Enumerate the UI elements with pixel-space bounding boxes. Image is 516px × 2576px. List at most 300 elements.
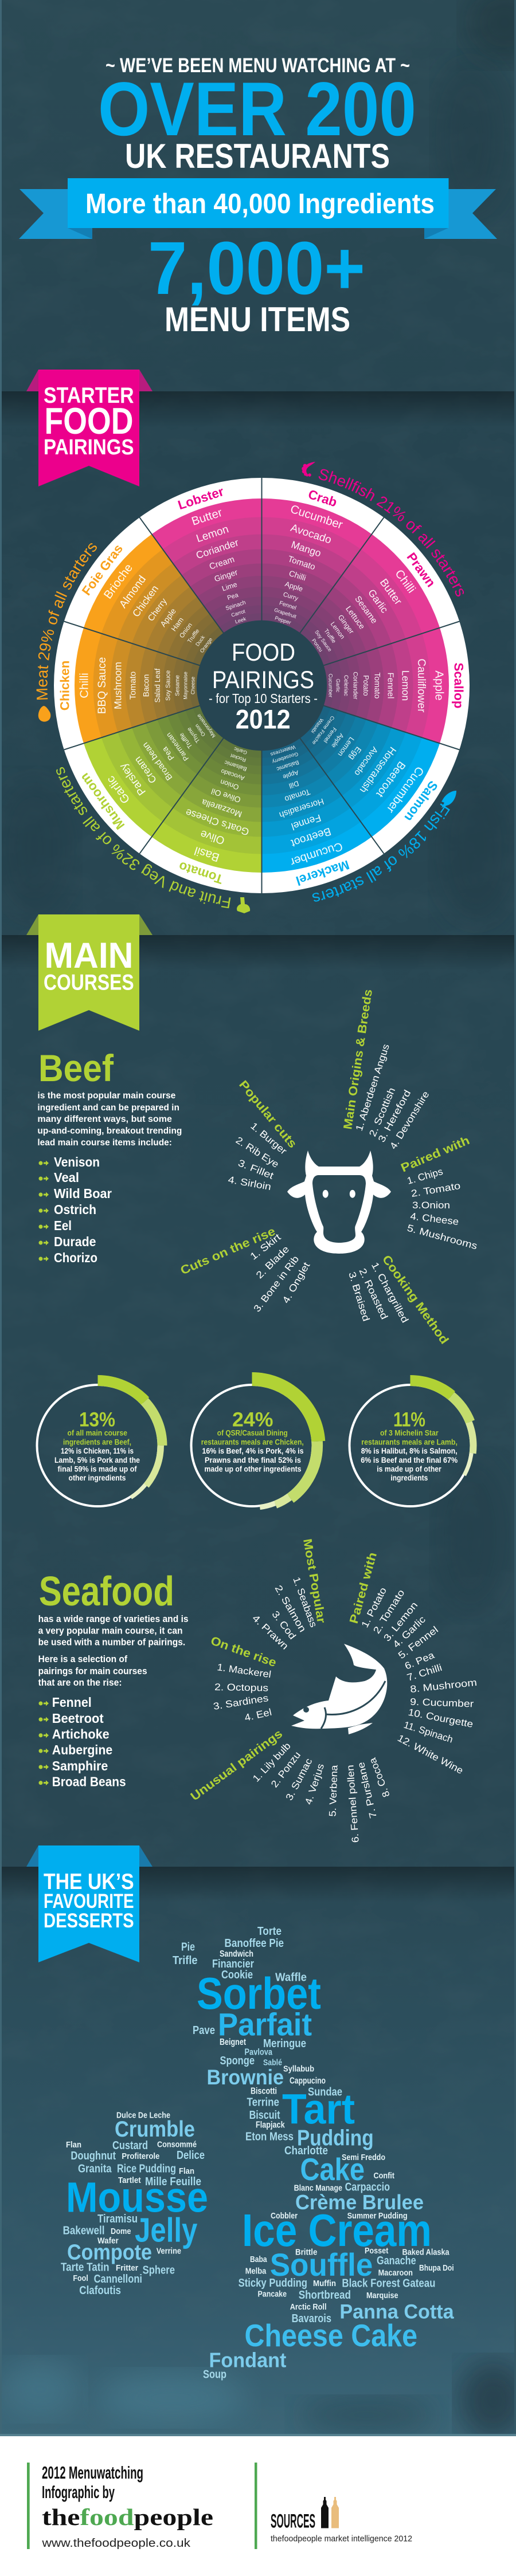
segment: tomato: Olive Oil bbox=[210, 787, 242, 804]
word cloud: UK map of desserts: Bakewell bbox=[63, 2224, 104, 2237]
list: pairings on the rise: Fennel bbox=[52, 1695, 92, 1710]
paragraph: pairings for main courses bbox=[38, 1666, 147, 1676]
word cloud: UK map of desserts: Sponge bbox=[220, 2055, 255, 2067]
word cloud: UK map of desserts: Flan bbox=[66, 2140, 81, 2150]
beef radial: cooking method: 1. Chargrilled bbox=[369, 1260, 411, 1325]
beef radial: main origins and breeds bbox=[341, 988, 431, 1151]
word cloud: UK map of desserts: Arctic Roll bbox=[290, 2302, 327, 2312]
segment: crab: Chilli bbox=[288, 568, 307, 583]
segment: foie gras: Cherry bbox=[146, 596, 169, 623]
word cloud: UK map of desserts: Wafer bbox=[97, 2236, 119, 2245]
beef radial: paired with: 3.Onion bbox=[412, 1200, 450, 1211]
seafood radial: on the rise: 1. Mackerel bbox=[216, 1662, 272, 1680]
stat circle: 13% beef bbox=[33, 1381, 163, 1510]
segment: foie gras: Onion bbox=[178, 622, 194, 639]
segment: mushroom bbox=[77, 697, 228, 832]
word cloud: UK map of desserts: Sticky Pudding bbox=[239, 2277, 307, 2290]
paragraph: ingredient and can be prepared in bbox=[37, 1103, 179, 1113]
segment: crab: Fennel bbox=[279, 600, 297, 611]
word cloud: UK map of desserts: Baba bbox=[250, 2255, 267, 2264]
seafood radial: most popular: 1. Seabass bbox=[291, 1576, 319, 1629]
ribbon: 40,000 ingredients: More than 40,000 Ingredients bbox=[85, 189, 435, 219]
stat circle: 13% beef: of all main course bbox=[68, 1429, 127, 1438]
wheel centre title bbox=[197, 621, 327, 751]
segment: tomato: Avocado bbox=[220, 767, 245, 782]
segment: mackerel: Apple bbox=[282, 769, 299, 780]
word cloud: UK map of desserts: Confit bbox=[374, 2171, 394, 2181]
beef radial: popular cuts: 3. Fillet bbox=[237, 1157, 275, 1181]
word cloud: UK map of desserts: Torte bbox=[257, 1925, 282, 1938]
outer white ring bbox=[54, 478, 470, 893]
paragraph bbox=[37, 1091, 182, 1148]
segment: crab bbox=[256, 483, 351, 631]
seafood radial: on the rise: 4. Eel bbox=[244, 1707, 273, 1723]
word cloud: UK map of desserts: Tiramisu bbox=[97, 2213, 138, 2225]
seafood radial: on the rise: 2. Octopus bbox=[214, 1682, 268, 1694]
seafood radial: paired with: 9. Cucumber bbox=[410, 1697, 474, 1709]
seafood radial: on the rise bbox=[209, 1634, 278, 1723]
segment: chicken: Bacon bbox=[141, 674, 150, 697]
segment: mackerel: Dill bbox=[288, 779, 300, 790]
segment: scallop bbox=[327, 659, 466, 713]
list: pairings on the rise: Beetroot bbox=[52, 1711, 104, 1726]
segment: chicken: BBQ Sauce bbox=[96, 657, 108, 714]
word cloud: UK map of desserts: Meringue bbox=[263, 2037, 306, 2050]
icon: chicken leg bbox=[38, 706, 50, 722]
word cloud: UK map of desserts: Sundae bbox=[308, 2086, 342, 2099]
word cloud: UK map of desserts: Biscotti bbox=[251, 2087, 277, 2096]
section ribbon: favourite desserts: FAVOURITE bbox=[44, 1890, 134, 1913]
paragraph: that are on the rise: bbox=[38, 1678, 122, 1688]
word cloud: UK map of desserts: Syllabub bbox=[283, 2064, 314, 2074]
section ribbon: starter food pairings: FOOD bbox=[45, 400, 133, 442]
panel: beef copy bbox=[37, 1047, 182, 1265]
word cloud: UK map of desserts: Compote bbox=[67, 2240, 152, 2264]
paragraph: many different ways, but some bbox=[37, 1114, 172, 1124]
segment: mackerel: Balsamic bbox=[276, 759, 300, 772]
word cloud: UK map of desserts: Pancake bbox=[258, 2290, 287, 2299]
stat label: menu items: MENU ITEMS bbox=[165, 300, 350, 339]
word cloud: UK map of desserts: Sablé bbox=[263, 2058, 282, 2067]
panel: seafood copy bbox=[38, 1569, 189, 1789]
beef radial: cooking method: Cooking Method bbox=[380, 1253, 451, 1346]
stat circle: 13% beef: 12% is Chicken, 11% is bbox=[61, 1447, 134, 1455]
segment: scallop: Cucumber bbox=[327, 674, 333, 697]
word cloud: UK map of desserts: Mousse bbox=[66, 2174, 208, 2221]
segment: mushroom: Broad bean bbox=[140, 740, 174, 782]
list: pairings on the rise: Aubergine bbox=[52, 1742, 112, 1757]
segment: chicken: Sesame bbox=[174, 675, 181, 696]
stat circle: 11% lamb: 11% bbox=[393, 1408, 425, 1431]
word cloud: UK map of desserts: Semi Freddo bbox=[342, 2153, 385, 2162]
paragraph: lead main course items include: bbox=[37, 1138, 172, 1148]
stat circle: 13% beef: ingredients are Beef, bbox=[63, 1438, 131, 1446]
stat circle: 24% chicken: 16% is Beef, 4% is Pork, 4% is bbox=[202, 1447, 304, 1455]
word cloud: UK map of desserts: Beignet bbox=[220, 2037, 247, 2047]
seafood radial: paired with: 8. Mushroom bbox=[409, 1677, 478, 1695]
stat circle: 24% chicken: 24% bbox=[232, 1408, 273, 1431]
segment: mushroom: Parsley bbox=[117, 761, 148, 798]
green bands: fruit and veg bbox=[84, 706, 261, 873]
segment: lobster: Lemon bbox=[195, 523, 230, 545]
beef radial: paired with: 5. Mushrooms bbox=[406, 1223, 479, 1251]
seafood radial: paired with: 5. Fennel bbox=[396, 1624, 440, 1661]
segment: tomato: Basil bbox=[193, 844, 221, 864]
heading: beef: Beef bbox=[38, 1047, 114, 1089]
segment: prawn: Garlic bbox=[366, 587, 390, 615]
icon: fish bbox=[441, 791, 456, 808]
list: trending items: Chorizo bbox=[54, 1250, 97, 1265]
segment: crab: Avocado bbox=[289, 522, 333, 547]
word cloud: UK map of desserts: Financier bbox=[212, 1958, 254, 1970]
stat label: UK restaurants: UK RESTAURANTS bbox=[125, 137, 390, 175]
segment: tomato bbox=[167, 738, 273, 890]
segment: prawn: Chilli bbox=[392, 567, 418, 595]
beef radial: main origins and breeds: 2. Scottish bbox=[367, 1086, 397, 1138]
word cloud: UK map of desserts: Terrine bbox=[247, 2096, 279, 2108]
ribbon: 40,000 ingredients bbox=[19, 178, 497, 239]
icon: fish bbox=[291, 1644, 387, 1734]
beef radial: cuts on the rise: 3. Bone in Rib bbox=[252, 1254, 301, 1314]
word cloud: UK map of desserts: Tartlet bbox=[118, 2176, 141, 2185]
segment: chicken: Cheese bbox=[190, 677, 196, 694]
word cloud: UK map of desserts: Cannelloni bbox=[94, 2273, 142, 2286]
seafood radial: unusual pairings: Unusual pairings bbox=[188, 1727, 285, 1804]
list: trending items: Durade bbox=[54, 1234, 96, 1249]
segment: tomato: Onion bbox=[219, 777, 240, 791]
segment: salmon: Apple bbox=[330, 732, 345, 749]
credit block: www.thefoodpeople.co.uk bbox=[41, 2537, 191, 2550]
segment: foie gras bbox=[79, 541, 226, 671]
segment: salmon: Egg bbox=[347, 745, 363, 762]
segment: lobster: Ginger bbox=[213, 567, 239, 583]
word cloud: UK map of desserts: Doughnut bbox=[71, 2150, 116, 2162]
segment: tomato: Rocket bbox=[229, 753, 247, 763]
sources block: thefoodpeople market intelligence 2012 bbox=[271, 2534, 412, 2544]
segment: chicken: Chilli bbox=[78, 673, 91, 698]
credit block: 2012 Menuwatching bbox=[42, 2463, 143, 2483]
seafood radial: paired with: Paired with bbox=[347, 1551, 380, 1625]
word cloud: UK map of desserts: Cake bbox=[300, 2151, 365, 2187]
segment: mushroom: Onion bbox=[194, 723, 206, 737]
beef radial: cooking method: 3. Braised bbox=[346, 1271, 372, 1322]
word cloud: UK map of desserts: Pavlova bbox=[244, 2048, 272, 2057]
seafood radial: paired with: 12. White Wine bbox=[396, 1733, 465, 1776]
paragraph: up-and-coming, breakout trending bbox=[37, 1126, 182, 1136]
segment: salmon: Salmon bbox=[401, 778, 440, 824]
section ribbon: starter food pairings: PAIRINGS bbox=[44, 435, 134, 460]
stat: over 200: OVER 200 bbox=[98, 67, 416, 152]
heading: seafood: Seafood bbox=[39, 1569, 174, 1615]
word cloud: UK map of desserts: Bavarois bbox=[292, 2312, 331, 2325]
paragraph: has a wide range of varieties and is bbox=[38, 1614, 189, 1624]
word cloud: UK map of desserts: Biscuit bbox=[249, 2109, 280, 2122]
beef radial: popular cuts: 1. Burger bbox=[248, 1121, 289, 1157]
word cloud: UK map of desserts: Crumble bbox=[115, 2117, 195, 2142]
beef radial: paired with bbox=[399, 1134, 479, 1251]
segment: salmon: Horseradish bbox=[358, 745, 398, 795]
section ribbon: starter food pairings: STARTER bbox=[44, 383, 134, 408]
stat circle: 24% chicken bbox=[186, 1379, 319, 1512]
word cloud: UK map of desserts: Summer Pudding bbox=[347, 2211, 408, 2221]
segment: mackerel: Tomato bbox=[283, 787, 311, 804]
beef radial: popular cuts bbox=[227, 1078, 299, 1192]
stat circle: 11% lamb: 8% is Halibut, 8% is Salmon, bbox=[361, 1447, 458, 1455]
word cloud: UK map of desserts: Banoffee Pie bbox=[225, 1937, 284, 1950]
list: trending items: Venison bbox=[54, 1155, 100, 1169]
word cloud: UK map of desserts: Cookie bbox=[221, 1969, 253, 1981]
segment: scallop: Garlic bbox=[335, 679, 341, 693]
intro line: ~ WE’VE BEEN MENU WATCHING AT ~ bbox=[105, 54, 410, 77]
blue bands: fish bbox=[263, 706, 440, 873]
word cloud: UK map of desserts: Soup bbox=[203, 2369, 226, 2381]
segment: chicken: Chicken bbox=[57, 661, 72, 710]
word cloud: UK map of desserts: Jelly bbox=[135, 2211, 198, 2249]
seafood radial: unusual pairings: 1. Lily bulb bbox=[251, 1741, 293, 1784]
segment: crab: Pepper bbox=[274, 615, 292, 626]
word cloud: UK map of desserts: Carpaccio bbox=[345, 2181, 390, 2194]
word cloud: UK map of desserts: Dome bbox=[111, 2226, 131, 2236]
wheel centre title: PAIRINGS bbox=[212, 666, 314, 694]
segment: scallop: Apple bbox=[432, 670, 445, 701]
list: trending items: Eel bbox=[54, 1218, 72, 1233]
caption: shellfish share: Shellfish 21% of all starters bbox=[319, 469, 464, 597]
credit block bbox=[27, 2463, 213, 2550]
segment dividers bbox=[64, 478, 459, 893]
segment: chicken bbox=[57, 657, 196, 714]
seafood radial: most popular: 4. Prawn bbox=[250, 1613, 291, 1652]
beef radial: main origins and breeds: 1. Aberdeen Angus bbox=[354, 1043, 392, 1132]
segment: mushroom: Garlic bbox=[104, 773, 132, 806]
word cloud: UK map of desserts: Tart bbox=[282, 2086, 355, 2133]
seafood radial: unusual pairings: 3. Sumac bbox=[284, 1756, 315, 1802]
paragraph: a very popular main course, it can bbox=[38, 1626, 183, 1636]
segment: mushroom: Thyme bbox=[186, 726, 201, 744]
word cloud: UK map of desserts: Consommé bbox=[157, 2139, 197, 2149]
segment: scallop: Fennel bbox=[386, 673, 396, 698]
section ribbon: starter food pairings bbox=[26, 370, 153, 486]
word cloud: UK map of desserts: Pudding bbox=[297, 2126, 374, 2151]
word cloud: UK map of desserts: Pie bbox=[181, 1941, 195, 1954]
seafood radial: paired with: 11. Spinach bbox=[402, 1719, 454, 1745]
word cloud: UK map of desserts: Tarte Tatin bbox=[61, 2261, 110, 2273]
word cloud: UK map of desserts: Waffle bbox=[275, 1972, 307, 1984]
segment: foie gras: Orange bbox=[199, 637, 213, 654]
word cloud: UK map of desserts: Crème Brulee bbox=[295, 2190, 424, 2214]
icon: vegetable bbox=[237, 897, 250, 913]
wheel centre title: - for Top 10 Starters - bbox=[209, 691, 318, 706]
segment: crab: Apple bbox=[284, 580, 304, 593]
segment: chicken: Soy Sauce bbox=[165, 670, 171, 701]
word cloud: UK map of desserts: Muffin bbox=[313, 2279, 336, 2288]
word cloud: UK map of desserts: Profiterole bbox=[122, 2151, 159, 2161]
pink bands: shellfish bbox=[152, 498, 449, 743]
segment: lobster: Lobster bbox=[176, 484, 226, 512]
segment: prawn: Lettuce bbox=[344, 604, 367, 631]
segment: scallop: Cauliflower bbox=[415, 659, 427, 713]
segment: chicken: Mushroom bbox=[112, 662, 124, 709]
list: pairings on the rise: Artichoke bbox=[52, 1727, 110, 1742]
seafood radial: paired with: 1. Potato bbox=[359, 1585, 389, 1629]
segment: lobster: Lime bbox=[221, 580, 238, 593]
word cloud: UK map of desserts: Marquise bbox=[366, 2291, 398, 2300]
segment: crab: Curry bbox=[282, 591, 299, 602]
seafood radial: on the rise: On the rise bbox=[209, 1634, 278, 1670]
stat circle: 11% lamb: ingredients bbox=[390, 1474, 428, 1482]
segment: chicken: Salad Leaf bbox=[154, 668, 162, 702]
beef radial: paired with: 4. Cheese bbox=[410, 1211, 459, 1227]
seafood radial: paired with: 7. Chilli bbox=[405, 1662, 443, 1683]
segment: crab: Mango bbox=[290, 539, 323, 559]
segment: foie gras: Almond bbox=[117, 574, 148, 610]
word cloud: UK map of desserts: Melba bbox=[245, 2267, 267, 2276]
segment: prawn: Prawn bbox=[404, 550, 438, 590]
word cloud: UK map of desserts: Sandwich bbox=[220, 1949, 253, 1959]
credit block: Infographic by bbox=[42, 2482, 115, 2502]
segment: foie gras: Brioche bbox=[101, 561, 135, 602]
word cloud: UK map of desserts: Cheese Cake bbox=[244, 2318, 417, 2353]
segment: mackerel bbox=[256, 740, 351, 888]
segment: salmon: Wasabi bbox=[310, 717, 325, 735]
word cloud: UK map of desserts: Brownie bbox=[206, 2065, 284, 2089]
word cloud: UK map of desserts bbox=[61, 1925, 454, 2381]
segment: crab: Grapefruit bbox=[273, 607, 298, 619]
segment: foie gras: Chicken bbox=[130, 583, 161, 619]
word cloud: UK map of desserts: Trifle bbox=[173, 1954, 197, 1967]
segment: scallop: Coriander bbox=[352, 672, 359, 700]
list: trending items: Wild Boar bbox=[54, 1186, 112, 1201]
stat circle: 13% beef: Lamb, 5% is Pork and the bbox=[54, 1456, 140, 1464]
seafood radial: most popular bbox=[250, 1538, 328, 1652]
word cloud: UK map of desserts: Blanc Manage bbox=[294, 2184, 342, 2193]
seafood radial: unusual pairings: 6. Fennel pollen bbox=[345, 1765, 361, 1843]
segment: mushroom: Pea bbox=[160, 745, 176, 762]
seafood radial: paired with: 6. Pea bbox=[403, 1650, 436, 1672]
seafood radial: on the rise: 3. Sardines bbox=[213, 1693, 269, 1712]
list: pairings on the rise: Samphire bbox=[52, 1758, 108, 1773]
logo: thefoodpeople: the food people bbox=[42, 2504, 213, 2530]
segment: prawn: Butter bbox=[377, 577, 404, 607]
segment: scallop: Celeriac bbox=[343, 675, 349, 696]
segment: mackerel: Cucumber bbox=[288, 839, 345, 869]
beef radial: cooking method: 2. Roasted bbox=[357, 1267, 390, 1321]
word cloud: UK map of desserts: Ganache bbox=[377, 2255, 416, 2267]
segment: mackerel: Gooseberry bbox=[271, 751, 299, 765]
stat circle: 24% chicken: of QSR/Casual Dining bbox=[217, 1429, 288, 1438]
wheel centre title: FOOD bbox=[232, 639, 295, 666]
segment: mushroom: Truffle bbox=[178, 731, 194, 749]
segment: foie gras: Duck bbox=[194, 634, 206, 647]
word cloud: UK map of desserts: Flan bbox=[179, 2166, 194, 2176]
beef radial: cuts on the rise: Cuts on the rise bbox=[178, 1225, 277, 1278]
icon: cow head bbox=[287, 1150, 391, 1254]
segment: mushroom: Parmesan bbox=[165, 731, 190, 762]
seafood radial: paired with: 2. Tomato bbox=[371, 1588, 406, 1636]
segment: scallop: Tomato bbox=[373, 673, 382, 699]
word cloud: UK map of desserts: Cappucino bbox=[290, 2076, 326, 2086]
segment: crab: Tomato bbox=[287, 554, 316, 572]
segment: lobster: Coriander bbox=[194, 536, 240, 561]
paragraph: Here is a selection of bbox=[38, 1654, 128, 1664]
seafood radial: most popular: 3. Cod bbox=[269, 1609, 298, 1642]
headline block bbox=[19, 54, 497, 339]
segment: salmon: Beetroot bbox=[373, 759, 408, 800]
list: trending items: Veal bbox=[54, 1170, 79, 1185]
segment: scallop: Potato bbox=[362, 675, 370, 696]
beef radial: main origins and breeds: Main Origins & Breeds bbox=[341, 988, 375, 1130]
segment: salmon: Creme Fraiche bbox=[311, 715, 335, 746]
word cloud: UK map of desserts: Macaroon bbox=[378, 2268, 413, 2277]
segment: crab: Crab bbox=[306, 487, 339, 510]
section ribbon: favourite desserts bbox=[26, 1845, 153, 1962]
beef radial: cuts on the rise bbox=[178, 1225, 312, 1314]
word cloud: UK map of desserts: Sphere bbox=[143, 2264, 175, 2277]
segment: salmon: Lemon bbox=[336, 736, 355, 758]
word cloud: UK map of desserts: Fritter bbox=[116, 2263, 138, 2273]
word cloud: UK map of desserts: Eton Mess bbox=[245, 2131, 294, 2143]
word cloud: UK map of desserts: Ice Cream bbox=[242, 2205, 432, 2256]
segment: scallop: Scallop bbox=[452, 662, 466, 709]
sources block bbox=[255, 2463, 412, 2549]
word cloud: UK map of desserts: Granita bbox=[78, 2162, 112, 2175]
seafood radial: unusual pairings: 4. Verjus bbox=[303, 1762, 326, 1806]
segment: scallop: Lemon bbox=[400, 670, 411, 701]
segment: lobster: Butter bbox=[190, 506, 224, 528]
segment: salmon: Cucumber bbox=[384, 764, 427, 815]
segment: prawn: Ponzu bbox=[311, 638, 324, 653]
segment: foie gras: Foie Gras bbox=[79, 541, 126, 598]
seafood radial: paired with bbox=[347, 1551, 478, 1776]
segment: mackerel: Watercress bbox=[269, 744, 296, 757]
segment: mushroom: Mushroom bbox=[77, 771, 127, 832]
beef radial: paired with: 2. Tomato bbox=[411, 1180, 461, 1199]
segment: mushroom: Mayonnaise bbox=[196, 713, 217, 739]
segment: prawn bbox=[304, 550, 438, 662]
segment: tomato: Balsamic bbox=[224, 759, 248, 772]
word cloud: UK map of desserts: Cobbler bbox=[271, 2211, 298, 2221]
word cloud: UK map of desserts: Panna Cotta bbox=[339, 2300, 454, 2323]
beef radial: popular cuts: Popular cuts bbox=[236, 1078, 299, 1150]
stat circle: 11% lamb: of 3 Michelin Star bbox=[380, 1429, 439, 1438]
word cloud: UK map of desserts: Charlotte bbox=[284, 2145, 328, 2157]
seafood radial: unusual pairings: 7. Purslane bbox=[355, 1761, 379, 1819]
segment: tomato: Mozzarella bbox=[200, 797, 243, 819]
beef radial: cooking method bbox=[346, 1253, 451, 1346]
segment: salmon: Avocado bbox=[352, 745, 380, 777]
segment: prawn: Lemon bbox=[329, 621, 346, 641]
segment: foie gras: Truffle bbox=[186, 628, 201, 645]
stat circle: 24% chicken: made up of other ingredients bbox=[204, 1465, 302, 1474]
word cloud: UK map of desserts: Custard bbox=[112, 2139, 148, 2152]
caption: fish share: Fish 18% of all starters bbox=[312, 803, 450, 902]
word cloud: UK map of desserts: Bhupa Doi bbox=[419, 2263, 454, 2273]
caption: meat share: Meat 29% of all starters bbox=[37, 543, 97, 700]
stat circle: 13% beef: final 59% is made up of bbox=[57, 1465, 137, 1474]
seafood radial: unusual pairings: 8. Cocoa bbox=[367, 1756, 392, 1799]
beef radial: paired with: Paired with bbox=[399, 1134, 472, 1175]
stat circle: 24% chicken: Prawns and the final 52% is bbox=[205, 1456, 301, 1464]
seafood radial: unusual pairings: 2. Ponzu bbox=[269, 1750, 303, 1789]
word cloud: UK map of desserts: Mille Feuille bbox=[145, 2176, 201, 2188]
list: trending items bbox=[39, 1155, 112, 1265]
beef radial: cuts on the rise: 1. Skirt bbox=[248, 1231, 283, 1262]
word cloud: UK map of desserts: Fool bbox=[73, 2273, 88, 2283]
beef radial: main origins and breeds: 4. Devonshire bbox=[388, 1089, 431, 1151]
stat circle: 13% beef: other ingredients bbox=[69, 1474, 126, 1482]
stat circle: 11% lamb: is made up of other bbox=[377, 1465, 441, 1474]
word cloud: UK map of desserts: Brittle bbox=[295, 2247, 317, 2257]
segment: tomato: Garlic bbox=[233, 746, 248, 756]
